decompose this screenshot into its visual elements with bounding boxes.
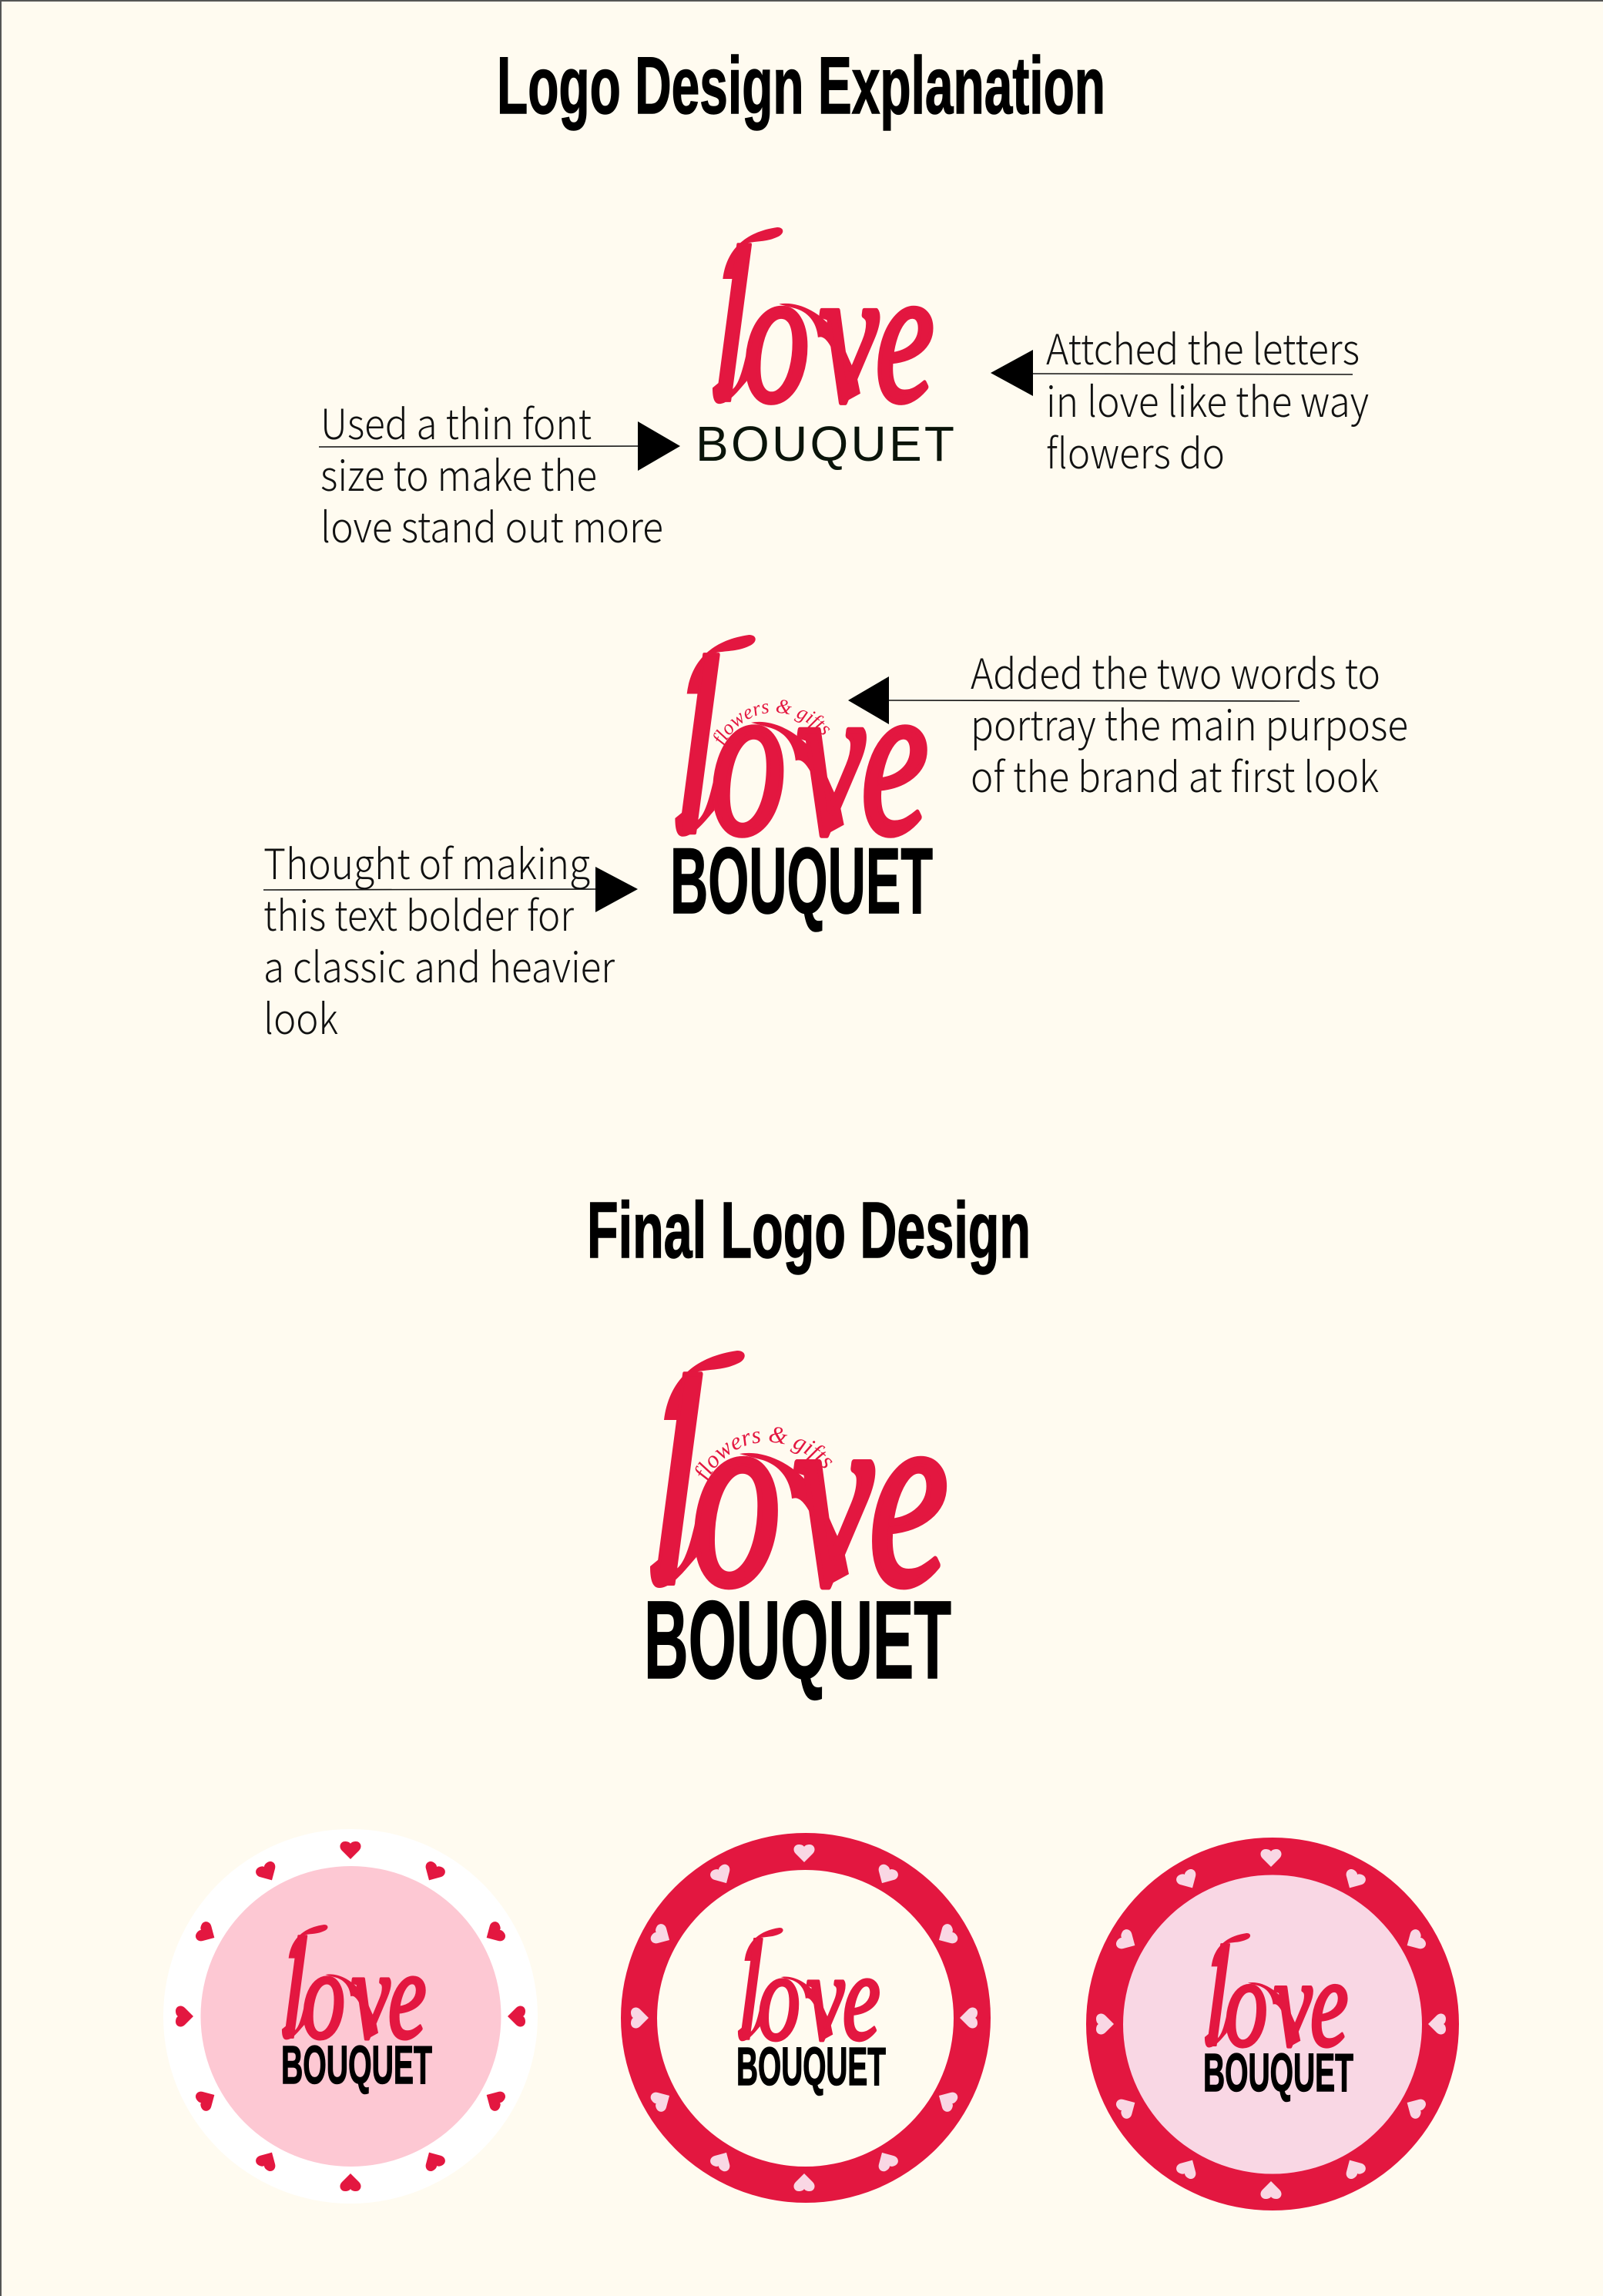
logo wordmark: love with flowers and gifts: e	[869, 1350, 948, 1640]
logo wordmark: love with flowers and gifts: v	[793, 1350, 874, 1640]
callout: thought of making	[263, 831, 638, 1046]
callout: thought of making: look	[263, 985, 338, 1046]
logo wordmark: love: v	[820, 227, 878, 443]
logo wordmark: love: l	[283, 1911, 307, 2067]
heading: final logo design: Final Logo Design	[587, 1186, 1031, 1274]
callout: used a thin font: Used a thin font	[320, 391, 592, 451]
logo wordmark: love: o	[758, 1928, 800, 2067]
logo wordmark: love with flowers and gifts: flowers & gifts	[713, 700, 830, 745]
logo: flowers and gifts version	[670, 610, 964, 933]
callout: used a thin font: love stand out more	[320, 494, 663, 555]
logo wordmark: love: v	[1274, 1934, 1313, 2073]
logo wordmark: love: e	[388, 1925, 427, 2066]
logo wordmark: love: e	[876, 227, 934, 443]
logo wordmark: thin bouquet: BOUQUET	[696, 416, 954, 472]
callout: added the two words: of the brand at first look	[971, 744, 1379, 804]
logo wordmark: love: l	[715, 206, 751, 446]
callout: thought of making: this text bolder for	[263, 882, 575, 943]
logo wordmark: love	[738, 1915, 880, 2069]
logo wordmark: love with flowers and gifts	[650, 1322, 948, 1645]
logo: love bouquet thin version	[696, 206, 954, 472]
arrow: left pointing	[848, 676, 889, 724]
logo wordmark: bold bouquet: BOUQUET	[281, 2035, 432, 2095]
arrow: right pointing	[638, 421, 680, 471]
logo wordmark: love: o	[743, 227, 810, 443]
logo wordmark: love with flowers and gifts: l	[653, 1322, 703, 1645]
logo wordmark: love: o	[302, 1925, 345, 2066]
logo wordmark: love: e	[1310, 1934, 1348, 2073]
callout: added the two words: portray the main purpose	[971, 692, 1408, 753]
logo wordmark: love: e	[843, 1928, 880, 2067]
logo wordmark: love: l	[739, 1915, 763, 2069]
logo wordmark: love	[1205, 1919, 1348, 2075]
callout: attached the letters: Attched the letters	[1046, 316, 1360, 377]
logo wordmark: love with flowers and gifts	[675, 610, 928, 885]
logo wordmark: bold bouquet: BOUQUET	[670, 828, 933, 933]
logo: final	[644, 1322, 951, 1702]
callout: attached the letters: in love like the way	[1046, 368, 1369, 429]
logo wordmark: love: v	[351, 1925, 390, 2066]
callout: added the two words	[848, 640, 1408, 804]
callout: attached the letters	[991, 316, 1369, 481]
arrow: right pointing	[595, 867, 638, 912]
logo wordmark: love with flowers and gifts: e	[861, 636, 928, 881]
callout: attached the letters: flowers do	[1046, 420, 1225, 481]
logo wordmark: bold bouquet: BOUQUET	[1203, 2043, 1353, 2103]
logo wordmark: love: v	[807, 1928, 844, 2067]
badge: red ring with cream centre	[621, 1833, 991, 2203]
logo wordmark: love	[282, 1911, 427, 2067]
logo wordmark: love with flowers and gifts: flowers & gifts	[695, 1427, 833, 1481]
logo wordmark: love with flowers and gifts: l	[678, 610, 719, 885]
callout: thought of making: Thought of making	[263, 831, 590, 891]
logo wordmark: love	[713, 206, 934, 446]
logo wordmark: bold bouquet: BOUQUET	[644, 1578, 951, 1702]
hearts ring	[176, 1841, 525, 2191]
callout: thought of making: a classic and heavier	[263, 934, 615, 995]
arrow: left pointing	[991, 350, 1033, 396]
callout: used a thin font	[319, 391, 680, 555]
logo wordmark: love: l	[1206, 1919, 1229, 2075]
logo wordmark: bold bouquet: BOUQUET	[736, 2036, 886, 2096]
title: Logo Design Explanation	[497, 41, 1105, 131]
callout: added the two words: Added the two words to	[971, 640, 1380, 701]
logo wordmark: love with flowers and gifts: v	[797, 636, 864, 881]
hearts ring	[1096, 1849, 1446, 2199]
logo wordmark: love with flowers and gifts: o	[692, 1350, 780, 1640]
badge: white ring with pink centre	[163, 1829, 538, 2204]
logo wordmark: love: o	[1225, 1934, 1268, 2073]
badge: red ring with pale pink centre	[1086, 1838, 1459, 2210]
logo wordmark: love with flowers and gifts: o	[710, 636, 786, 881]
callout: used a thin font: size to make the	[320, 442, 597, 503]
hearts ring	[631, 1845, 978, 2191]
